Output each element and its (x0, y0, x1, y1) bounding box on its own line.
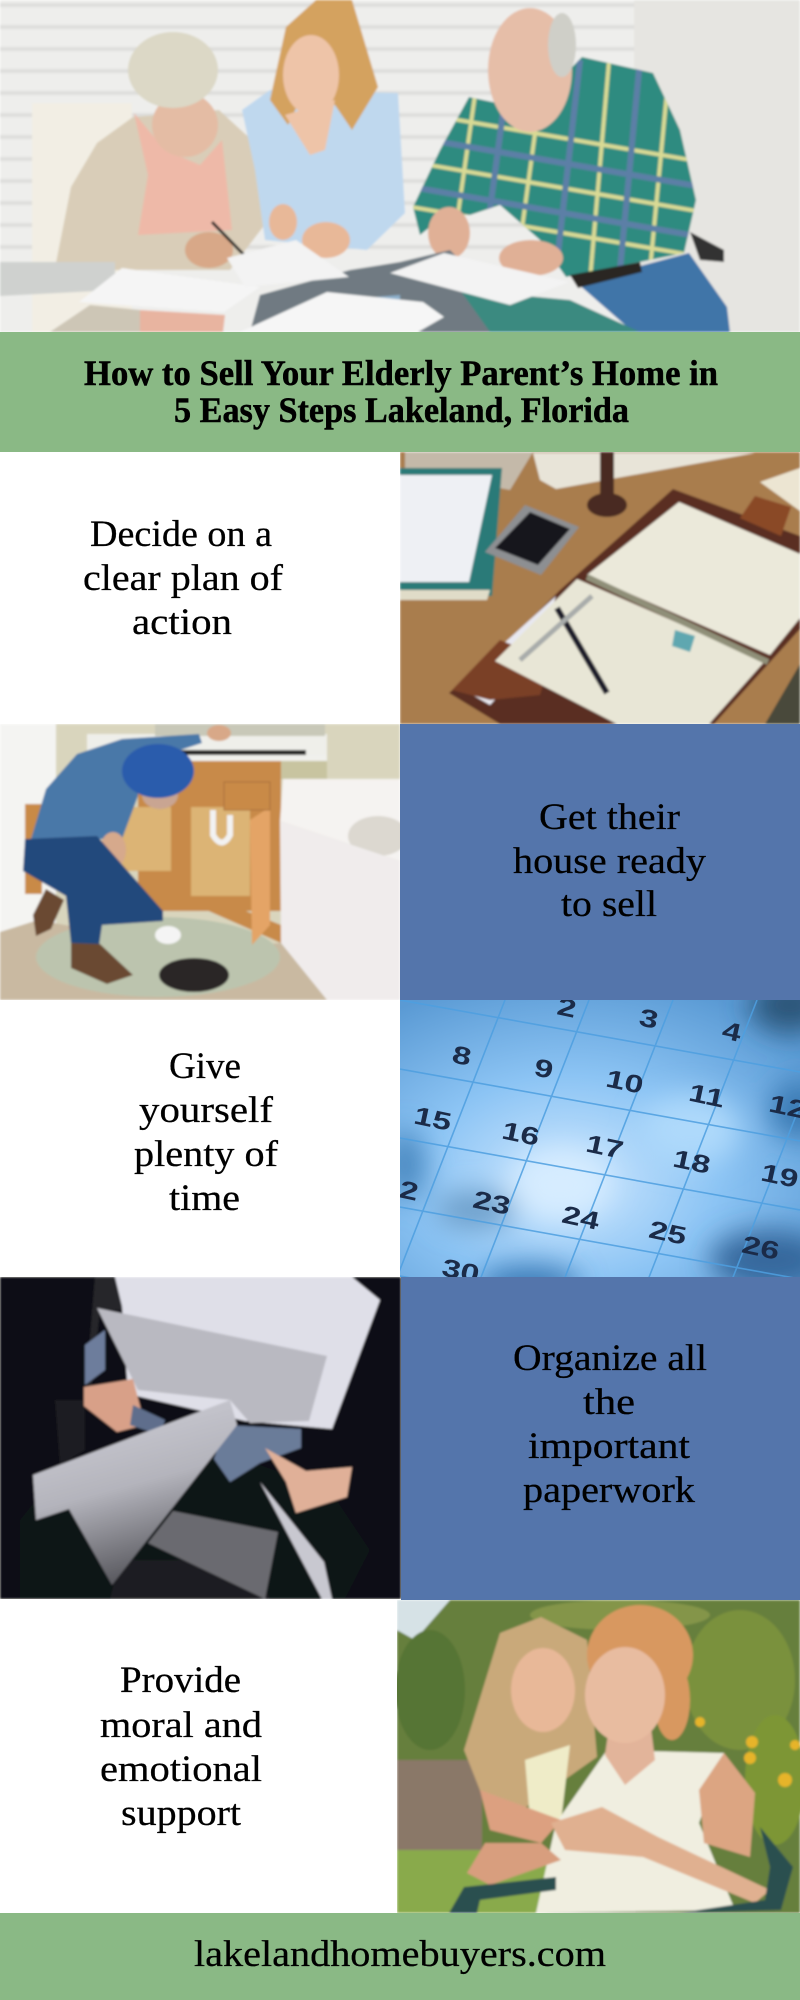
title text (84, 353, 718, 430)
panel: step 3 text: time (169, 1178, 240, 1219)
calendar numbers: 16 (499, 1117, 542, 1152)
calendar numbers: 10 (603, 1065, 646, 1100)
panel: step 1 text: Decide on a (90, 514, 272, 555)
calendar numbers: 8 (450, 1041, 474, 1072)
title text: How to Sell Your Elderly Parent’s Home in (84, 353, 718, 393)
middle woman (242, 90, 405, 250)
panel: step 5 text: moral and (100, 1705, 263, 1746)
man (413, 57, 696, 277)
photo: planner on a wooden desk (400, 452, 800, 724)
calendar numbers: 15 (411, 1102, 454, 1137)
calendar grid (394, 1000, 800, 1348)
panel: step 4 text: Organize all (513, 1338, 707, 1379)
title text: 5 Easy Steps Lakeland, Florida (174, 390, 629, 430)
panel: step 5 text: emotional (100, 1749, 262, 1790)
photo: blue calendar close-up (378, 993, 800, 1289)
panel: step 2 text (400, 724, 800, 1000)
calendar numbers: 30 (439, 1254, 482, 1289)
photo: elderly couple and daughter signing papers (0, 0, 800, 332)
panel: step 2 text: Get their (539, 797, 680, 838)
panel: step 5 text (0, 1600, 397, 1913)
panel: step 5 text: support (121, 1793, 242, 1834)
panel: step 3 text: Give (169, 1046, 241, 1087)
calendar numbers: 11 (686, 1079, 727, 1113)
photo: man surrounded by flying papers (0, 1277, 401, 1599)
panel: step 3 text (0, 1000, 400, 1276)
calendar numbers: 22 (378, 1172, 421, 1207)
panel: step 3 text: plenty of (134, 1134, 279, 1175)
panel: step 1 text (0, 452, 400, 724)
calendar numbers: 17 (583, 1130, 626, 1165)
panel: step 1 text: clear plan of (83, 558, 284, 599)
calendar shading (385, 977, 800, 1305)
woman left (56, 110, 263, 270)
panel: step 4 text: paperwork (523, 1470, 696, 1511)
panel: step 1 text: action (132, 602, 232, 643)
panel: step 4 text: important (528, 1426, 691, 1467)
panel: step 3 text: yourself (139, 1090, 274, 1131)
table (0, 262, 115, 296)
photo: daughter embracing elderly mother in garden (397, 1600, 800, 1913)
panel: step 4 text (401, 1277, 800, 1600)
calendar numbers (378, 993, 800, 1289)
panel: step 4 text: the (583, 1382, 635, 1423)
calendar numbers: 23 (470, 1186, 513, 1221)
calendar numbers: 2 (555, 993, 579, 1024)
footer banner (0, 1913, 800, 2000)
title banner (0, 332, 800, 452)
calendar numbers: 18 (670, 1145, 713, 1180)
calendar numbers: 3 (637, 1004, 661, 1035)
calendar numbers: 9 (532, 1054, 556, 1085)
calendar numbers: 25 (646, 1216, 689, 1251)
calendar numbers: 24 (559, 1201, 602, 1236)
plumber (31, 734, 202, 839)
calendar numbers: 4 (720, 1017, 744, 1048)
panel: step 2 text: to sell (561, 884, 657, 925)
photo: plumber fixing a bathroom sink (0, 724, 400, 1000)
website address: lakelandhomebuyers.com (194, 1934, 606, 1975)
panel: step 5 text: Provide (120, 1660, 241, 1701)
calendar numbers: 19 (758, 1159, 800, 1194)
calendar numbers: 26 (739, 1231, 782, 1266)
panel: step 2 text: house ready (513, 841, 707, 882)
